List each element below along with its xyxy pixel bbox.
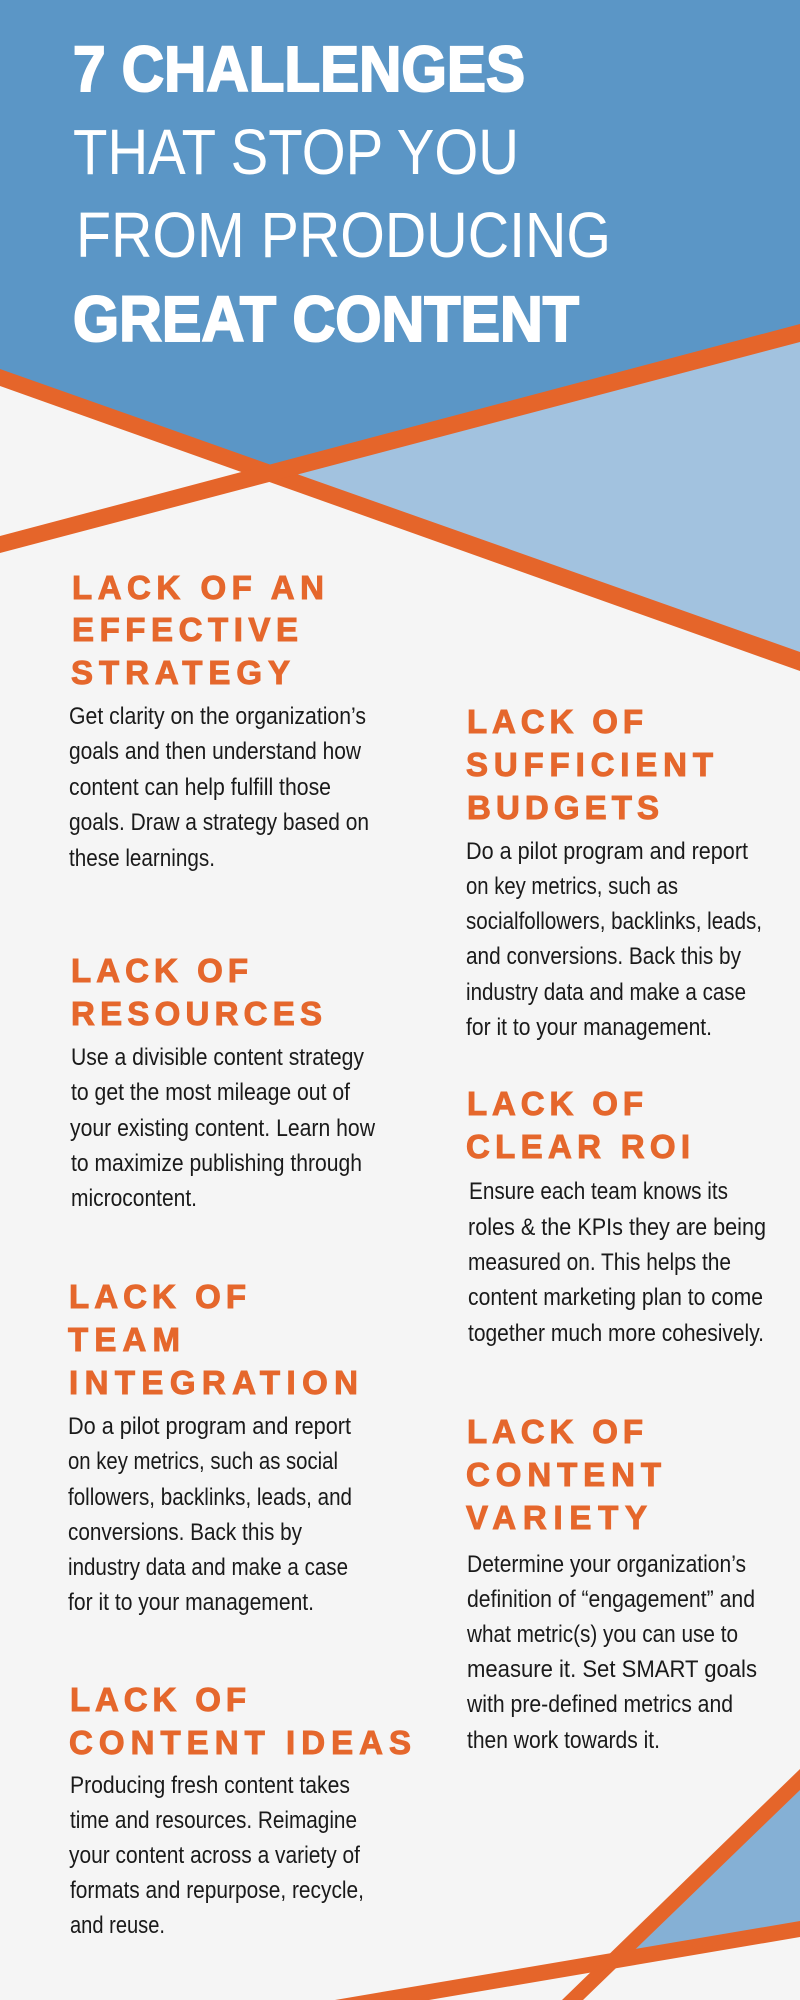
body text: together much more cohesively.: [468, 1320, 764, 1347]
heading: EFFECTIVE: [72, 611, 298, 648]
body text: [68, 1413, 352, 1616]
body text: conversions. Back this by: [68, 1519, 302, 1546]
section: lack of clear roi: [466, 1085, 766, 1347]
title: FROM PRODUCING: [76, 199, 611, 271]
heading: RESOURCES: [71, 995, 322, 1032]
heading: [71, 952, 322, 1032]
section: lack of resources: [70, 952, 376, 1212]
heading: [69, 1681, 411, 1761]
body text: [468, 1178, 766, 1347]
heading: LACK OF: [71, 952, 248, 989]
title: [73, 33, 611, 355]
heading: LACK OF: [467, 1085, 643, 1122]
body text: [466, 838, 762, 1041]
body text: goals. Draw a strategy based on: [69, 809, 369, 836]
body text: and conversions. Back this by: [466, 943, 741, 970]
bottom blue triangle: [632, 1787, 800, 1951]
header panel: blue background: [0, 0, 800, 468]
body text: for it to your management.: [68, 1589, 314, 1616]
title: THAT STOP YOU: [73, 116, 519, 188]
heading: [466, 703, 713, 826]
title: GREAT CONTENT: [73, 283, 579, 355]
body text: microcontent.: [71, 1185, 197, 1212]
orange crossing lines bottom: [335, 1769, 800, 2000]
body text: [70, 1044, 376, 1212]
body text: Producing fresh content takes: [70, 1772, 350, 1799]
body text: what metric(s) you can use to: [466, 1621, 738, 1648]
heading: LACK OF: [69, 1278, 246, 1315]
body text: [466, 1551, 757, 1754]
heading: [71, 569, 324, 691]
title: 7 CHALLENGES: [73, 33, 525, 105]
body text: [69, 703, 369, 872]
body text: goals and then understand how: [69, 738, 362, 765]
body text: for it to your management.: [466, 1014, 712, 1041]
body text: [69, 1772, 364, 1939]
heading: TEAM: [68, 1321, 180, 1358]
body text: content can help fulfill those: [69, 774, 331, 801]
orange crossing lines top: [0, 324, 800, 671]
body text: your content across a variety of: [69, 1842, 360, 1869]
section: lack of content variety: [466, 1413, 757, 1754]
heading: INTEGRATION: [69, 1364, 358, 1401]
heading: [466, 1085, 690, 1165]
body text: Do a pilot program and report: [466, 838, 748, 865]
heading: SUFFICIENT: [466, 746, 713, 783]
body text: Do a pilot program and report: [68, 1413, 351, 1440]
heading: CONTENT IDEAS: [69, 1724, 411, 1761]
body text: with pre-defined metrics and: [466, 1691, 733, 1718]
heading: VARIETY: [466, 1499, 647, 1536]
body text: Determine your organization’s: [467, 1551, 746, 1578]
body text: roles & the KPIs they are being: [468, 1214, 766, 1241]
body text: Get clarity on the organization’s: [69, 703, 366, 730]
heading: CONTENT: [466, 1456, 661, 1493]
heading: [68, 1278, 358, 1401]
body text: your existing content. Learn how: [70, 1115, 376, 1142]
body text: Use a divisible content strategy: [71, 1044, 364, 1071]
body text: and reuse.: [70, 1912, 165, 1939]
body text: measured on. This helps the: [468, 1249, 731, 1276]
body text: time and resources. Reimagine: [70, 1807, 357, 1834]
heading: LACK OF: [70, 1681, 246, 1718]
section: lack of sufficient budgets: [466, 703, 762, 1041]
body text: formats and repurpose, recycle,: [70, 1877, 364, 1904]
section: lack of content ideas: [69, 1681, 411, 1939]
body text: content marketing plan to come: [468, 1284, 763, 1311]
body text: measure it. Set SMART goals: [467, 1656, 757, 1683]
body text: to maximize publishing through: [71, 1150, 362, 1177]
body text: on key metrics, such as social: [68, 1448, 338, 1475]
heading: LACK OF: [467, 703, 643, 740]
heading: STRATEGY: [71, 654, 290, 691]
body text: definition of “engagement” and: [467, 1586, 755, 1613]
heading: LACK OF AN: [72, 569, 324, 606]
body text: Ensure each team knows its: [469, 1178, 728, 1205]
body text: then work towards it.: [467, 1727, 660, 1754]
section: lack of an effective strategy: [69, 569, 369, 872]
body text: followers, backlinks, leads, and: [68, 1484, 352, 1511]
body text: to get the most mileage out of: [71, 1079, 350, 1106]
heading: LACK OF: [467, 1413, 643, 1450]
body text: industry data and make a case: [68, 1554, 348, 1581]
heading: [466, 1413, 661, 1536]
body text: these learnings.: [69, 845, 215, 872]
section: lack of team integration: [68, 1278, 358, 1616]
heading: BUDGETS: [467, 789, 659, 826]
body text: on key metrics, such as: [466, 873, 678, 900]
light blue triangle: [290, 338, 800, 656]
body text: industry data and make a case: [466, 979, 746, 1006]
heading: CLEAR ROI: [466, 1128, 690, 1165]
